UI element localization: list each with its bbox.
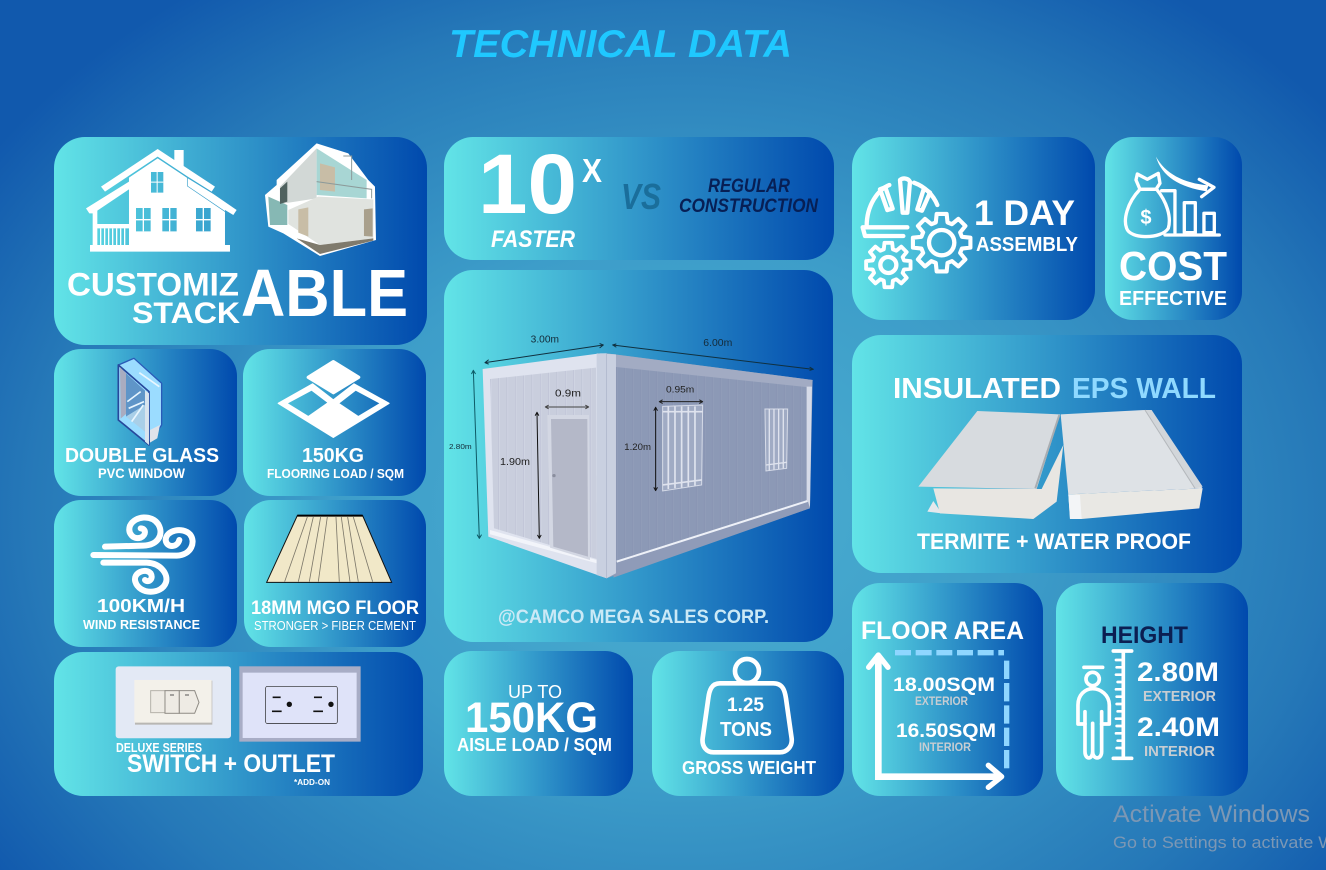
- dimension arrows: [472, 344, 813, 538]
- text: effective: EFFECTIVE: [1119, 288, 1227, 310]
- text: add-on: *ADD-ON: [294, 778, 330, 787]
- panel: double glass: [54, 349, 237, 496]
- text: gross weight: GROSS WEIGHT: [682, 758, 816, 778]
- text: stronger than fiber cement: STRONGER > FIBER CEMENT: [254, 618, 416, 633]
- panel: cost effective: [1105, 137, 1242, 320]
- icon: money bag and falling bars: [1125, 157, 1219, 237]
- panel: customizable stackable: [54, 137, 427, 345]
- image: eps sandwich panels: [918, 410, 1203, 519]
- text: construction: CONSTRUCTION: [679, 196, 819, 217]
- dimension labels: 6.00m: [703, 338, 732, 349]
- text: interior area: 16.50SQM: [896, 721, 996, 742]
- dimension labels: 2.80m: [449, 442, 472, 451]
- door: [547, 415, 590, 560]
- text: faster: FASTER: [491, 226, 576, 253]
- text: insulated: INSULATED: [893, 373, 1061, 405]
- panel: mgo floor: [244, 500, 426, 647]
- text: 10: 10: [478, 137, 577, 231]
- label: exterior: EXTERIOR: [1143, 688, 1216, 705]
- icon: mgo floor board: [267, 516, 392, 582]
- icon: wind: [93, 517, 193, 592]
- text: 1.25: 1.25: [727, 695, 764, 716]
- image: stacked container building: [265, 143, 376, 256]
- text: x: X: [582, 152, 602, 189]
- text: 150kg: 150KG: [465, 694, 598, 742]
- panel: insulated eps wall: [852, 335, 1242, 573]
- label: exterior: EXTERIOR: [915, 694, 968, 708]
- text: flooring load / sqm: FLOORING LOAD / SQM: [267, 466, 404, 481]
- panel: height: [1056, 583, 1248, 796]
- panel: 10x faster: [444, 137, 834, 260]
- text: wind resistance: WIND RESISTANCE: [83, 617, 200, 632]
- windows: [663, 405, 703, 491]
- text: stack: STACK: [132, 297, 240, 330]
- label: interior: INTERIOR: [919, 740, 971, 754]
- text: vs: VS: [621, 176, 661, 217]
- text: able: ABLE: [241, 256, 408, 331]
- text: up to: UP TO: [508, 682, 562, 702]
- panel: wind resistance: [54, 500, 237, 647]
- text: floor area: FLOOR AREA: [861, 617, 1024, 645]
- icon: floor tiles: [278, 362, 389, 437]
- text: customiz: CUSTOMIZ: [67, 266, 239, 302]
- panel: switch and outlet: [54, 652, 423, 796]
- text: termite + water proof: TERMITE + WATER PROOF: [917, 529, 1191, 554]
- text: company credit: @CAMCO MEGA SALES CORP.: [498, 607, 769, 628]
- text: regular: REGULAR: [708, 176, 790, 197]
- text: eps wall: EPS WALL: [1072, 373, 1216, 405]
- dimension labels: 3.00m: [531, 334, 559, 345]
- text: 150kg: 150KG: [302, 445, 364, 467]
- panel: floor area: [852, 583, 1043, 796]
- text: cost: COST: [1119, 243, 1227, 289]
- text: aisle load / sqm: AISLE LOAD / SQM: [457, 735, 612, 755]
- dimension labels: [449, 334, 732, 468]
- text: pvc window: PVC WINDOW: [98, 466, 185, 481]
- icon: house: [86, 149, 237, 252]
- panel: flooring load: [243, 349, 426, 496]
- icon: floor area arrows: [869, 653, 1007, 787]
- text: double glass: DOUBLE GLASS: [65, 445, 219, 467]
- text: switch + outlet: SWITCH + OUTLET: [127, 750, 335, 778]
- icon: double glass window: [118, 358, 162, 445]
- image: container unit: [483, 353, 813, 578]
- text: tons: TONS: [720, 719, 772, 741]
- text: 100km/h: 100KM/H: [97, 596, 185, 616]
- panel: 1 day assembly: [852, 137, 1095, 320]
- watermark: activate windows: Activate Windows: [1113, 801, 1310, 828]
- icon: helmet and gears: [863, 178, 970, 287]
- text: interior height: 2.40M: [1137, 712, 1220, 742]
- dimension labels: 1.20m: [624, 442, 651, 452]
- text: 18mm mgo floor: 18MM MGO FLOOR: [251, 598, 419, 619]
- image: wall outlet: [239, 666, 361, 742]
- panel: container dimensions: [444, 270, 833, 642]
- text: assembly: ASSEMBLY: [976, 234, 1079, 256]
- label: interior: INTERIOR: [1144, 743, 1215, 760]
- image: wall switch: [116, 666, 231, 738]
- dimension labels: 1.90m: [500, 457, 530, 468]
- watermark: activate windows: [1113, 801, 1326, 852]
- text: exterior area: 18.00SQM: [893, 675, 995, 696]
- dimension labels: 0.95m: [666, 384, 695, 394]
- text: height: HEIGHT: [1101, 622, 1188, 649]
- icon: money bag and falling bars: $: [1140, 207, 1152, 229]
- text: deluxe series: DELUXE SERIES: [116, 741, 202, 755]
- text: 1 day: 1 DAY: [974, 194, 1075, 233]
- icon: person and ruler: [1078, 651, 1132, 758]
- panel: aisle load: [444, 651, 633, 796]
- dimension labels: 0.9m: [555, 389, 581, 400]
- title: TECHNICAL DATA: [449, 23, 792, 66]
- panel: gross weight: [652, 651, 844, 796]
- icon: weight: [703, 659, 792, 752]
- text: exterior height: 2.80M: [1137, 657, 1219, 687]
